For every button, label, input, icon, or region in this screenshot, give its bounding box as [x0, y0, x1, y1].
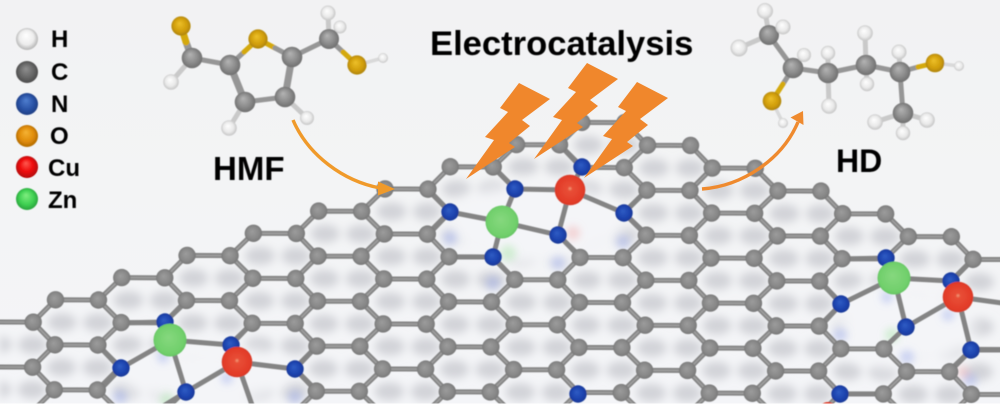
legend item O — [16, 123, 69, 150]
metal coordination bonds — [98, 145, 1000, 405]
HMF molecule — [163, 6, 388, 136]
legend item Cu — [16, 155, 80, 182]
graphene lattice — [0, 111, 1000, 407]
HD atoms — [730, 3, 964, 140]
legend item N: N — [51, 91, 68, 118]
lattice shadow under graphene sheet — [0, 128, 1000, 407]
legend item N — [16, 91, 68, 118]
icon: lightning bolts — [466, 63, 668, 179]
label: HD: HD — [836, 143, 882, 179]
legend item C — [16, 59, 68, 86]
lightning bolt left — [466, 83, 550, 179]
title: Electrocatalysis: Electrocatalysis — [430, 25, 693, 63]
legend item C: C — [51, 59, 68, 86]
legend item Cu: Cu — [48, 155, 80, 182]
copper atoms — [222, 175, 973, 407]
lightning bolt middle — [534, 63, 618, 159]
legend item H: H — [51, 26, 68, 53]
legend — [16, 26, 80, 214]
HD bonds — [739, 11, 959, 133]
nitrogen atoms — [112, 158, 980, 403]
HD molecule — [730, 3, 964, 140]
zinc atoms — [154, 206, 910, 356]
lattice bonds — [0, 119, 1000, 407]
legend item Zn: Zn — [48, 187, 77, 214]
arrow: HMF to catalyst — [293, 120, 395, 196]
arrow: catalyst to HD — [702, 111, 804, 189]
legend item O: O — [50, 123, 69, 150]
legend item Zn — [16, 187, 77, 214]
HMF bonds — [171, 13, 383, 128]
HMF atoms — [163, 6, 388, 136]
lightning bolt right — [584, 82, 668, 178]
legend item H — [16, 26, 68, 53]
label: HMF: HMF — [213, 150, 284, 187]
carbon atoms — [23, 111, 984, 403]
